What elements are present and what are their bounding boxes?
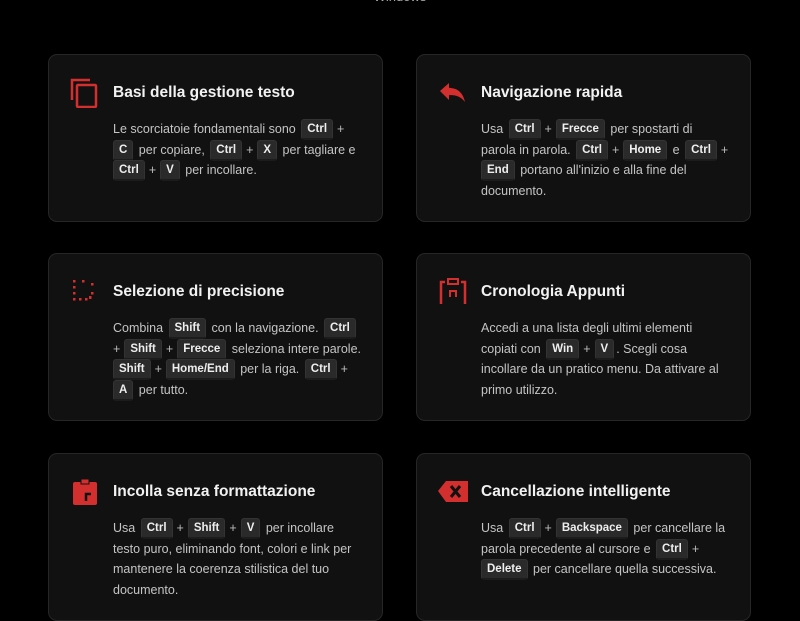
- panel: basi: [48, 54, 383, 222]
- panel: selezione: [48, 253, 383, 421]
- body: parola in parola. + e +: [481, 142, 728, 156]
- body: Usa + per spostarti di: [481, 122, 692, 136]
- icon: copy: [70, 78, 98, 108]
- body: Ctrl: [515, 123, 535, 135]
- body: copiati con + . Scegli cosa: [481, 342, 687, 356]
- body: Combina con la navigazione.: [113, 321, 319, 335]
- body: Ctrl: [216, 144, 236, 156]
- body: Frecce: [183, 343, 220, 355]
- body: Delete: [487, 563, 522, 575]
- body: Usa + per cancellare la: [481, 521, 725, 535]
- body: Shift: [194, 522, 219, 534]
- body: V: [601, 343, 608, 355]
- icon: arrow back: [440, 83, 465, 102]
- title: Selezione di precisione: [113, 283, 284, 300]
- body: per copiare, + per tagliare e: [139, 142, 356, 156]
- icon: paste: [73, 480, 97, 505]
- body: documento.: [113, 582, 178, 596]
- body: V: [247, 522, 254, 534]
- body: + per incollare.: [149, 163, 257, 177]
- body: [113, 318, 361, 401]
- body: Win: [552, 343, 573, 355]
- title: Navigazione rapida: [481, 84, 622, 101]
- body: documento.: [481, 184, 546, 198]
- body: portano all'inizio e alla fine del: [520, 163, 687, 177]
- title: Cronologia Appunti: [481, 283, 625, 300]
- body: Home: [629, 144, 661, 156]
- body: Shift: [130, 343, 156, 355]
- body: A: [119, 384, 127, 396]
- body: Ctrl: [311, 363, 331, 375]
- icon: backspace: [438, 481, 468, 502]
- panel: cancellazione: [416, 453, 751, 621]
- body: incollare da un pratico menu. Da attivare al: [481, 362, 719, 376]
- body: V: [166, 164, 174, 176]
- body: Ctrl: [119, 164, 139, 176]
- body: End: [487, 164, 509, 176]
- body: + + seleziona intere parole.: [113, 342, 361, 356]
- body: Ctrl: [307, 123, 327, 135]
- title: Basi della gestione testo: [113, 84, 295, 101]
- body: testo puro, eliminando font, colori e link per: [113, 542, 351, 556]
- body: Shift: [174, 322, 200, 334]
- body: Accedi a una lista degli ultimi elementi: [481, 321, 692, 335]
- panel: navigazione: [416, 54, 751, 222]
- body: [481, 518, 726, 580]
- body: Home/End: [172, 363, 229, 375]
- title: Cancellazione intelligente: [481, 483, 670, 500]
- body: per tutto.: [139, 382, 188, 396]
- body: + per la riga. +: [155, 362, 348, 376]
- body: C: [119, 144, 127, 156]
- icon: clipboard: [440, 278, 466, 304]
- body: primo utilizzo.: [481, 382, 557, 396]
- body: Backspace: [562, 522, 622, 534]
- panel: cronologia: [416, 253, 751, 421]
- body: [113, 119, 356, 181]
- body: Frecce: [562, 123, 599, 135]
- body: [481, 119, 728, 198]
- body: [113, 518, 352, 596]
- body: Ctrl: [147, 522, 167, 534]
- panel: incolla: [48, 453, 383, 621]
- body: Ctrl: [515, 522, 535, 534]
- body: X: [263, 144, 271, 156]
- body: Ctrl: [330, 322, 350, 334]
- body: mantenere la coerenza stilistica del tuo: [113, 562, 329, 576]
- title: Incolla senza formattazione: [113, 483, 315, 500]
- body: [481, 321, 719, 396]
- body: per cancellare quella successiva.: [533, 562, 716, 576]
- body: Shift: [119, 363, 145, 375]
- body: parola precedente al cursore e +: [481, 542, 699, 556]
- body: Usa + + per incollare: [113, 521, 334, 535]
- body: Le scorciatoie fondamentali sono +: [113, 122, 344, 136]
- body: Ctrl: [582, 144, 602, 156]
- icon: dotted selection: [73, 280, 94, 300]
- body: Ctrl: [662, 543, 682, 555]
- body: Ctrl: [691, 144, 711, 156]
